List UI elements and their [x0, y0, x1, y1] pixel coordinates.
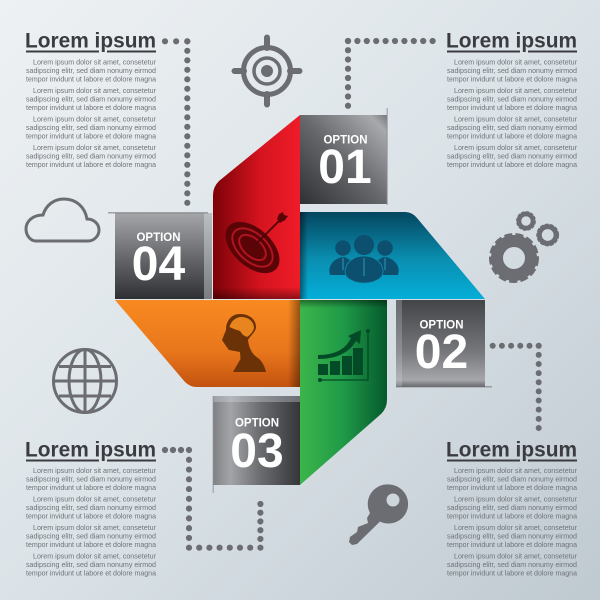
body text: top left: sadipscing elitr, sed diam nonumy eirmod	[26, 66, 156, 75]
panel: top right text	[446, 28, 578, 169]
body text: top left: tempor invidunt ut labore et dolore magna	[26, 103, 157, 112]
panel: option 01 box	[300, 108, 388, 205]
body text: top right: tempor invidunt ut labore et dolore magna	[447, 160, 578, 169]
number: 02: 02	[415, 326, 468, 379]
body text: top right: Lorem ipsum dolor sit amet, consetetur	[454, 58, 578, 66]
body text: top left: Lorem ipsum dolor sit amet, consetetur	[33, 114, 157, 124]
body text: bottom left	[26, 466, 157, 578]
body text: top left: sadipscing elitr, sed diam nonumy eirmod	[26, 152, 156, 160]
icon: head with brain	[222, 314, 266, 372]
body text: bottom right: Lorem ipsum dolor sit amet, consetetur	[454, 494, 578, 504]
number: 01: 01	[318, 141, 372, 194]
body text: bottom left: sadipscing elitr, sed diam nonumy eirmod	[26, 474, 156, 484]
body text: top left: tempor invidunt ut labore et dolore magna	[26, 160, 157, 169]
panel: option 04 box	[108, 212, 212, 299]
heading: top right: Lorem ipsum	[446, 28, 577, 52]
body text: top right: tempor invidunt ut labore et dolore magna	[447, 74, 578, 84]
body text: top left: sadipscing elitr, sed diam nonumy eirmod	[26, 94, 156, 104]
body text: bottom right: tempor invidunt ut labore et dolore magna	[447, 512, 578, 520]
body text: top right: tempor invidunt ut labore et dolore magna	[447, 103, 578, 112]
panel: bottom left text	[25, 438, 157, 578]
label: option 02: OPTION	[420, 318, 464, 332]
heading: bottom right: Lorem ipsum	[446, 438, 577, 462]
body text: bottom left: tempor invidunt ut labore et dolore magna	[26, 483, 157, 492]
label: option 04: OPTION	[136, 230, 180, 244]
body text: bottom right: Lorem ipsum dolor sit amet, consetetur	[454, 523, 578, 532]
body text: top right: sadipscing elitr, sed diam nonumy eirmod	[447, 152, 577, 160]
dotted connector: top left	[165, 41, 187, 203]
body text: bottom left: Lorem ipsum dolor sit amet, consetetur	[33, 552, 157, 560]
icon: growth chart	[318, 329, 370, 382]
body text: bottom left: sadipscing elitr, sed diam nonumy eirmod	[26, 532, 156, 540]
icon: business people	[329, 235, 399, 283]
body text: top right: tempor invidunt ut labore et dolore magna	[447, 132, 578, 140]
body text: bottom left: sadipscing elitr, sed diam nonumy eirmod	[26, 560, 156, 569]
dotted connector: top right	[348, 41, 433, 106]
heading: top left: Lorem ipsum	[25, 28, 156, 52]
panel: top left text	[25, 28, 157, 169]
body text: bottom left: sadipscing elitr, sed diam nonumy eirmod	[26, 503, 156, 512]
body text: top right: sadipscing elitr, sed diam nonumy eirmod	[447, 94, 577, 104]
body text: bottom right: tempor invidunt ut labore et dolore magna	[447, 483, 578, 492]
body text: top right: Lorem ipsum dolor sit amet, consetetur	[454, 86, 578, 95]
body text: bottom right: tempor invidunt ut labore et dolore magna	[447, 568, 578, 578]
body text: bottom left: tempor invidunt ut labore et dolore magna	[26, 540, 157, 549]
body text: top right: sadipscing elitr, sed diam nonumy eirmod	[447, 66, 577, 75]
body text: bottom left: tempor invidunt ut labore et dolore magna	[26, 512, 157, 520]
body text: top left: sadipscing elitr, sed diam nonumy eirmod	[26, 123, 156, 132]
label: option 03: OPTION	[235, 416, 279, 430]
icon: dartboard	[216, 212, 289, 283]
panel: option 02 box	[396, 300, 492, 388]
heading: bottom left: Lorem ipsum	[25, 438, 156, 462]
number: 04: 04	[132, 238, 186, 291]
icon: gears	[490, 212, 558, 282]
body text: top left: tempor invidunt ut labore et dolore magna	[26, 74, 157, 84]
number: 03: 03	[230, 425, 284, 478]
body text: top left: Lorem ipsum dolor sit amet, consetetur	[33, 86, 157, 95]
body text: top left: tempor invidunt ut labore et dolore magna	[26, 132, 157, 140]
body text: bottom right: sadipscing elitr, sed diam nonumy eirmod	[447, 474, 577, 484]
icon: cloud	[26, 199, 99, 241]
panel: red segment	[213, 115, 300, 299]
body text: bottom right: Lorem ipsum dolor sit amet, consetetur	[454, 552, 578, 560]
body text: top left: Lorem ipsum dolor sit amet, consetetur	[33, 143, 157, 152]
body text: top right: Lorem ipsum dolor sit amet, consetetur	[454, 143, 578, 152]
body text: bottom right	[447, 466, 578, 578]
body text: top right	[447, 58, 578, 169]
dotted connector: bottom left	[165, 450, 260, 548]
dotted connector: right	[493, 346, 539, 428]
body text: bottom right: Lorem ipsum dolor sit amet, consetetur	[454, 466, 578, 475]
panel: option 03 box	[212, 396, 300, 493]
body text: bottom right: sadipscing elitr, sed diam nonumy eirmod	[447, 560, 577, 569]
body text: bottom right: sadipscing elitr, sed diam nonumy eirmod	[447, 532, 577, 540]
icon: crosshair target	[234, 38, 300, 104]
icon: key	[349, 484, 408, 545]
body text: top left: Lorem ipsum dolor sit amet, consetetur	[33, 58, 157, 66]
label: option 01: OPTION	[324, 132, 368, 146]
panel: green segment	[300, 300, 387, 485]
body text: top left	[26, 58, 157, 169]
body text: bottom left: Lorem ipsum dolor sit amet, consetetur	[33, 523, 157, 532]
body text: bottom left: tempor invidunt ut labore et dolore magna	[26, 568, 157, 578]
body text: top right: Lorem ipsum dolor sit amet, consetetur	[454, 114, 578, 124]
body text: top right: sadipscing elitr, sed diam nonumy eirmod	[447, 123, 577, 132]
body text: bottom left: Lorem ipsum dolor sit amet, consetetur	[33, 466, 157, 475]
body text: bottom left: Lorem ipsum dolor sit amet, consetetur	[33, 494, 157, 504]
body text: bottom right: tempor invidunt ut labore et dolore magna	[447, 540, 578, 549]
body text: bottom right: sadipscing elitr, sed diam nonumy eirmod	[447, 503, 577, 512]
panel: bottom right text	[446, 438, 578, 578]
panel: orange segment	[115, 300, 300, 387]
panel: blue segment	[300, 212, 485, 299]
icon: globe	[54, 350, 116, 412]
